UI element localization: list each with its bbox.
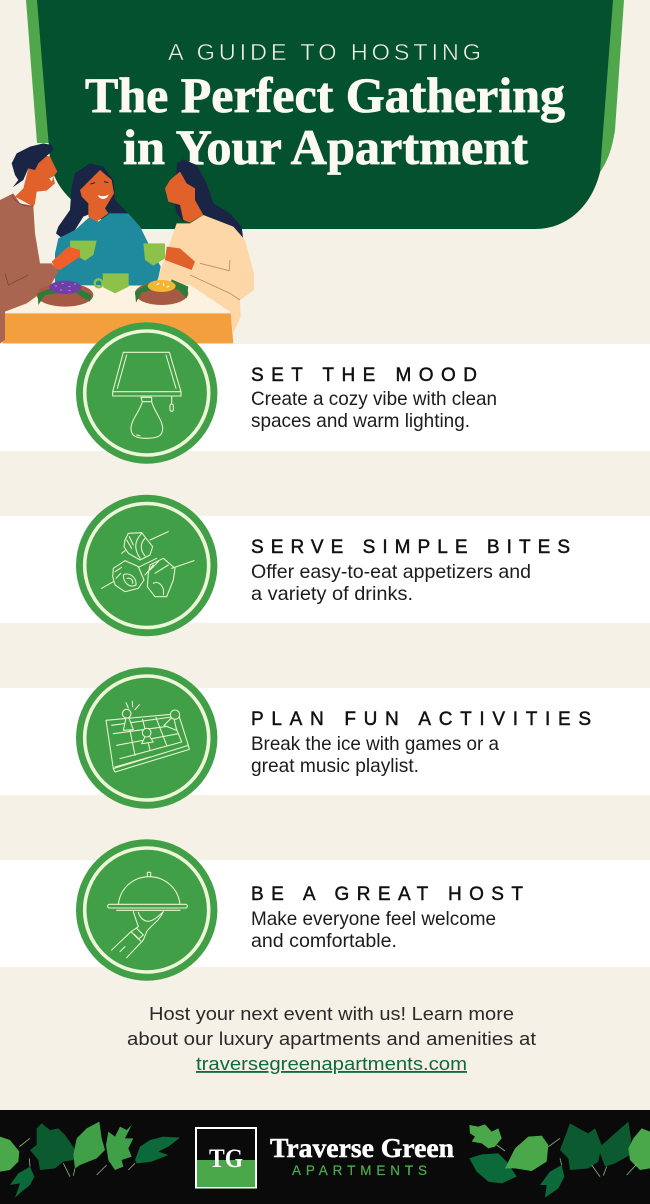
woman in peach [143, 159, 254, 333]
call to action: traversegreenapartments.com [196, 1053, 467, 1074]
right leaves [469, 1122, 650, 1198]
description [251, 561, 531, 605]
icon: lamp [76, 322, 217, 464]
icon: skewers [76, 495, 217, 636]
call to action: Host your next event with us! Learn more [149, 1003, 514, 1024]
description: Offer easy-to-eat appetizers and [251, 561, 531, 583]
icon: board game [76, 667, 217, 809]
description [251, 908, 496, 952]
description: spaces and warm lighting. [251, 410, 470, 432]
logo mark [196, 1128, 256, 1188]
main title [85, 67, 565, 175]
plate: yellow dish [135, 279, 188, 305]
icon: cloche [76, 839, 217, 981]
description [251, 388, 497, 432]
plate: grapes [37, 281, 93, 307]
illustration: friends at table [0, 143, 254, 343]
description: Create a cozy vibe with clean [251, 388, 497, 410]
description: a variety of drinks. [251, 583, 413, 605]
main title: The Perfect Gathering [85, 67, 565, 123]
description [251, 733, 499, 777]
description: and comfortable. [251, 930, 397, 952]
heading: SET THE MOOD [251, 365, 477, 386]
call to action [127, 1003, 536, 1074]
row bands [0, 344, 650, 967]
header title [85, 39, 565, 175]
description: great music playlist. [251, 755, 419, 777]
cup [95, 273, 129, 293]
heading: BE A GREAT HOST [251, 884, 523, 905]
step 4: be a great host [76, 839, 523, 981]
step 1: set the mood [76, 322, 497, 464]
kicker: A GUIDE TO HOSTING [168, 39, 481, 65]
brand subtitle: APARTMENTS [292, 1163, 427, 1178]
step 3: plan fun activities [76, 667, 591, 809]
header banner [26, 0, 624, 229]
heading: PLAN FUN ACTIVITIES [251, 709, 591, 730]
woman in teal [55, 163, 161, 286]
call to action: about our luxury apartments and amenities at [127, 1028, 536, 1049]
table [3, 285, 233, 343]
footer bar [0, 1110, 650, 1204]
logo mark: TG [209, 1144, 243, 1173]
description: Make everyone feel welcome [251, 908, 496, 930]
main title: in Your Apartment [123, 119, 528, 175]
man in brown [0, 143, 97, 343]
step 2: serve simple bites [76, 495, 570, 636]
heading: SERVE SIMPLE BITES [251, 537, 570, 558]
brand name: Traverse Green [270, 1133, 454, 1163]
left leaves [0, 1122, 180, 1198]
description: Break the ice with games or a [251, 733, 499, 755]
